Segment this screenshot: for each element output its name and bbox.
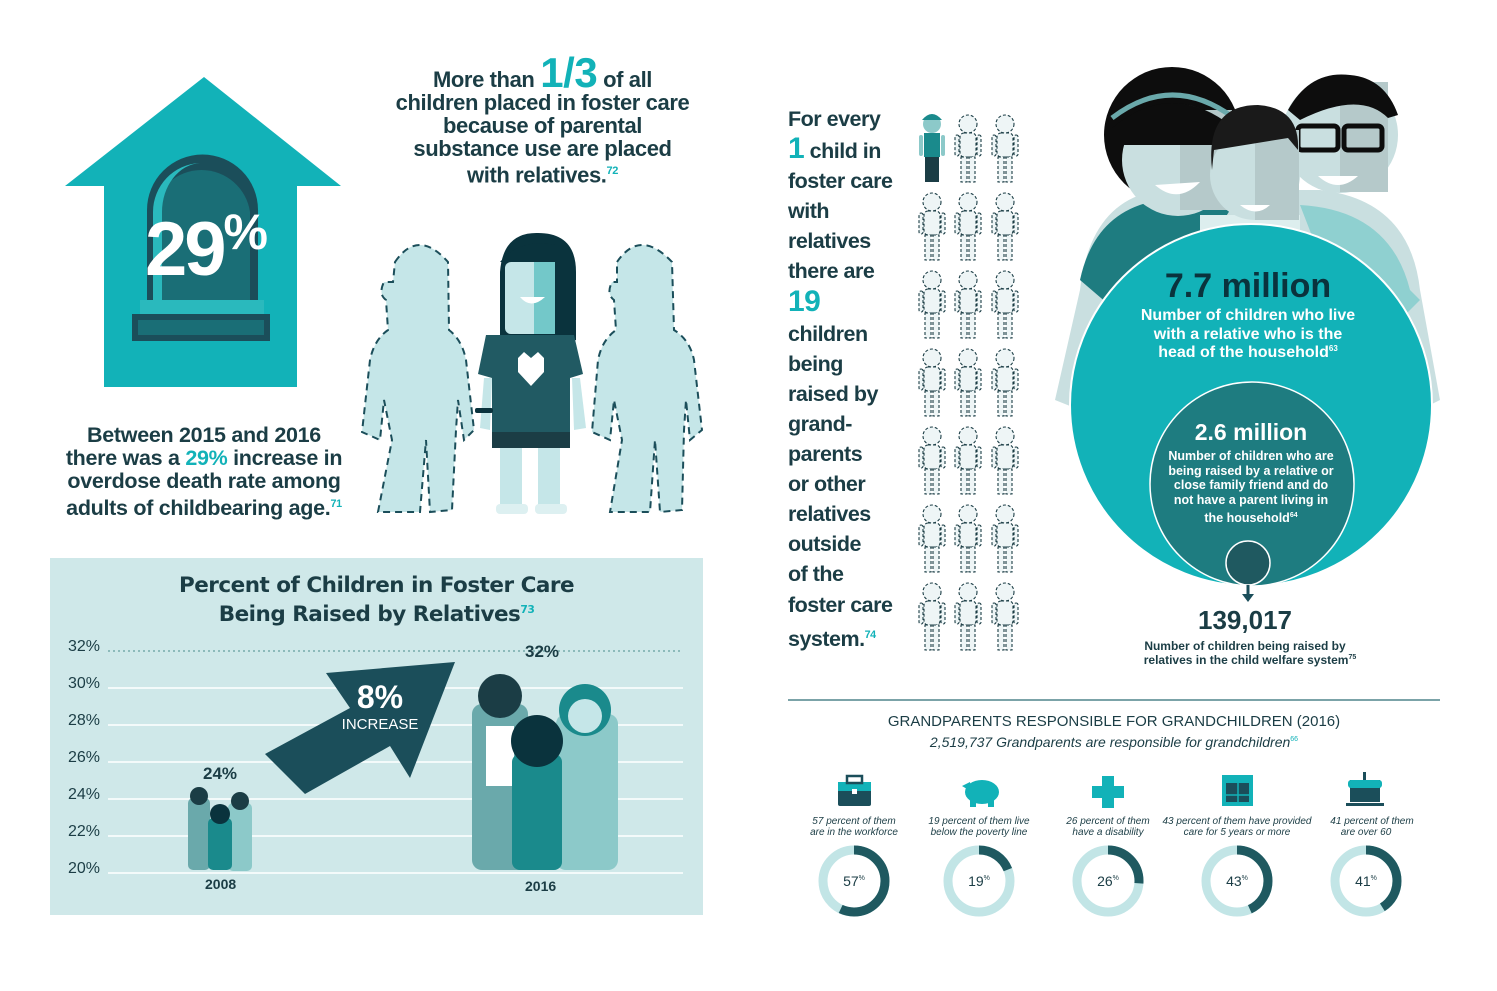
icon: piggy bank (962, 780, 999, 807)
illustration: family with circles: 139,017 (1198, 605, 1292, 635)
line chart axes: 20% (68, 860, 100, 877)
line chart axes: 32% (525, 642, 559, 661)
line chart axes: 2008 (205, 876, 236, 892)
illustration: family with circles: 63 (1329, 344, 1338, 353)
text: for every 1 child in foster care: outside (788, 532, 861, 556)
text: for every 1 child in foster care: with (788, 199, 829, 223)
donut stats row: are in the workforce (810, 827, 898, 838)
donut stats row: are over 60 (1341, 827, 1392, 838)
donut stats row: 19 (968, 873, 984, 889)
icon: calendar (1222, 775, 1253, 806)
text: for every 1 child in foster care: of the (788, 562, 844, 586)
line chart axes: 30% (68, 675, 100, 692)
donut stats row: 26 (1097, 873, 1113, 889)
text: for every 1 child in foster care: 1 child in (788, 132, 881, 165)
icon: briefcase (838, 776, 871, 806)
line chart axes: 32% (68, 638, 100, 655)
text: for every 1 child in foster care: there are (788, 259, 874, 283)
illustration: family with circles: not have a parent living in (1174, 493, 1328, 507)
people behind (1055, 190, 1440, 410)
illustration: family with circles: 7.7 million (1165, 267, 1331, 305)
line chart axes: 26% (68, 749, 100, 766)
icon: house arrow with tombstone: % (224, 204, 268, 260)
icon: house arrow with tombstone: 29 (145, 207, 224, 292)
text: overdose stat: overdose death rate among (67, 469, 341, 493)
text: one third placed with relatives: because of parental (443, 113, 642, 138)
illustration: family with circles: close family friend and do (1174, 478, 1328, 492)
illustration: family with circles: with a relative who is the (1153, 326, 1342, 343)
illustration: family with circles: 2.6 million (1195, 419, 1307, 445)
heading: grandparents responsible: 2,519,737 Grandparents are responsible for grandchildren66 (930, 734, 1298, 750)
text: for every 1 child in foster care: foster care (788, 592, 892, 616)
icon: medical cross (1092, 776, 1124, 808)
illustration: family with circles: 75 (1348, 654, 1356, 661)
donut stats row: 57 (843, 873, 859, 889)
text: one third placed with relatives: with relatives.72 (467, 162, 618, 187)
text: for every 1 child in foster care: 19 (788, 285, 820, 318)
text: overdose stat: Between 2015 and 2016 (87, 423, 321, 447)
line chart axes: 24% (68, 786, 100, 803)
text: for every 1 child in foster care: relatives (788, 502, 871, 526)
donut stats row: 43 percent of them have provided (1163, 816, 1312, 827)
chart title (179, 573, 574, 627)
donut stats row: below the poverty line (931, 827, 1028, 838)
text: for every 1 child in foster care: parents (788, 442, 862, 466)
icon: house arrow with tombstone (65, 77, 341, 387)
donut stats row: 19 percent of them live (928, 816, 1030, 827)
donut stats row: % (1242, 875, 1248, 882)
chart title: Percent of Children in Foster Care (179, 573, 574, 598)
illustration: family with circles: Number of children being raised by (1144, 639, 1346, 653)
text: one third placed with relatives (396, 49, 689, 187)
illustration: family with circles: Number of children who are (1168, 449, 1334, 463)
donut stats row: % (859, 875, 865, 882)
line chart axes: 24% (203, 764, 237, 783)
big family 2016 (472, 674, 618, 870)
panel: chart percent of children in foster care (50, 558, 703, 915)
donut stats row: 41 (1355, 873, 1371, 889)
icon: birthday cake (1346, 772, 1384, 806)
text: for every 1 child in foster care (788, 107, 892, 651)
arrow: 8% increase: 8% (357, 679, 403, 715)
donut stats row: 41 percent of them (1330, 816, 1414, 827)
text: for every 1 child in foster care: grand- (788, 412, 852, 436)
small family 2008 (188, 787, 252, 871)
donut stats row: % (1113, 875, 1119, 882)
illustration: family with circles: the household (1204, 511, 1290, 525)
illustration: girl with two ghost relatives (360, 233, 704, 514)
icon grid: 21 children (918, 114, 1019, 650)
text: for every 1 child in foster care: children (788, 322, 868, 346)
text: for every 1 child in foster care: foster care (788, 169, 892, 193)
illustration: family with circles (1055, 67, 1440, 667)
line chart axes: 2016 (525, 878, 556, 894)
text: one third placed with relatives: More than 1/3 of all (433, 49, 652, 96)
text: for every 1 child in foster care: relatives (788, 229, 871, 253)
arrow: 8% increase: INCREASE (342, 716, 418, 733)
arrow: 8% increase (265, 662, 455, 794)
donut stats row: % (984, 875, 990, 882)
donut stats row (810, 772, 1414, 916)
chart title: Being Raised by Relatives73 (219, 602, 534, 627)
line chart axes: 22% (68, 823, 100, 840)
text: overdose stat (66, 423, 342, 520)
text: overdose stat: adults of childbearing age.71 (66, 496, 342, 520)
donut stats row: have a disability (1072, 827, 1145, 838)
heading: grandparents responsible: GRANDPARENTS RESPONSIBLE FOR GRANDCHILDREN (2016) (888, 713, 1340, 730)
donut stats row: care for 5 years or more (1184, 827, 1291, 838)
line chart axes (68, 638, 683, 894)
text: for every 1 child in foster care: or other (788, 472, 865, 496)
illustration: family with circles: 64 (1290, 512, 1298, 519)
text: overdose stat: there was a 29% increase in (66, 446, 342, 470)
donut stats row: % (1371, 875, 1377, 882)
text: one third placed with relatives: substance use are placed (413, 136, 672, 161)
heading: grandparents responsible (888, 713, 1340, 750)
illustration: family with circles: head of the household (1158, 344, 1329, 361)
illustration: family with circles: Number of children who live (1141, 307, 1355, 324)
illustration: family with circles: relatives in the child welfare system (1144, 653, 1348, 667)
text: for every 1 child in foster care: system.74 (788, 627, 876, 651)
text: for every 1 child in foster care: For every (788, 107, 880, 131)
text: for every 1 child in foster care: raised by (788, 382, 878, 406)
text: one third placed with relatives: children placed in foster care (396, 90, 689, 115)
donut stats row: 26 percent of them (1065, 816, 1150, 827)
text: for every 1 child in foster care: being (788, 352, 843, 376)
donut stats row: 43 (1226, 873, 1242, 889)
line chart axes: 28% (68, 712, 100, 729)
big circle (1070, 224, 1432, 586)
illustration: family with circles: being raised by a relative or (1168, 464, 1334, 478)
donut stats row: 57 percent of them (812, 816, 896, 827)
